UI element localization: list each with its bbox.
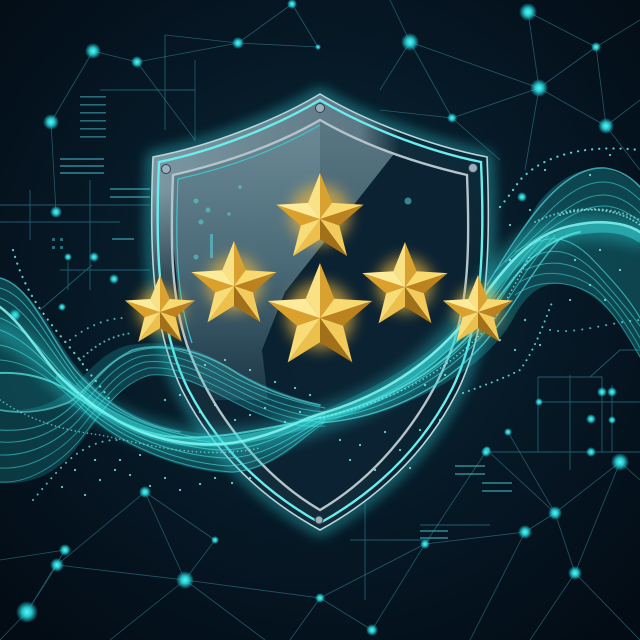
stars glow <box>137 185 501 350</box>
wave glow <box>0 227 640 442</box>
left fan lines <box>0 278 180 432</box>
wave bright cores <box>0 222 640 444</box>
shield rim lines <box>152 94 488 530</box>
star: far left <box>125 275 195 342</box>
shield outer glow <box>152 94 488 530</box>
shield <box>152 94 488 530</box>
dense bright ribbon <box>60 228 640 442</box>
ribbon fills <box>0 168 640 473</box>
star: upper left <box>191 241 277 322</box>
rising ribbon lines <box>320 237 562 423</box>
star: top <box>276 173 364 256</box>
shield frame <box>152 94 488 530</box>
stars <box>125 173 513 362</box>
rivets <box>162 104 478 524</box>
scattered particles <box>62 155 620 495</box>
dot grids <box>52 96 512 539</box>
faint nodes in glass <box>194 185 412 260</box>
star: upper right <box>362 242 448 323</box>
star: centre <box>268 263 372 362</box>
data waves <box>0 148 640 500</box>
right upper fan lines <box>487 168 640 285</box>
shield inner panel <box>172 120 468 510</box>
dotted particle streams <box>13 250 110 400</box>
glass reflection <box>173 122 394 400</box>
hump fan lines <box>0 348 325 430</box>
right falling fan lines <box>530 239 640 318</box>
star: far right <box>443 275 513 342</box>
